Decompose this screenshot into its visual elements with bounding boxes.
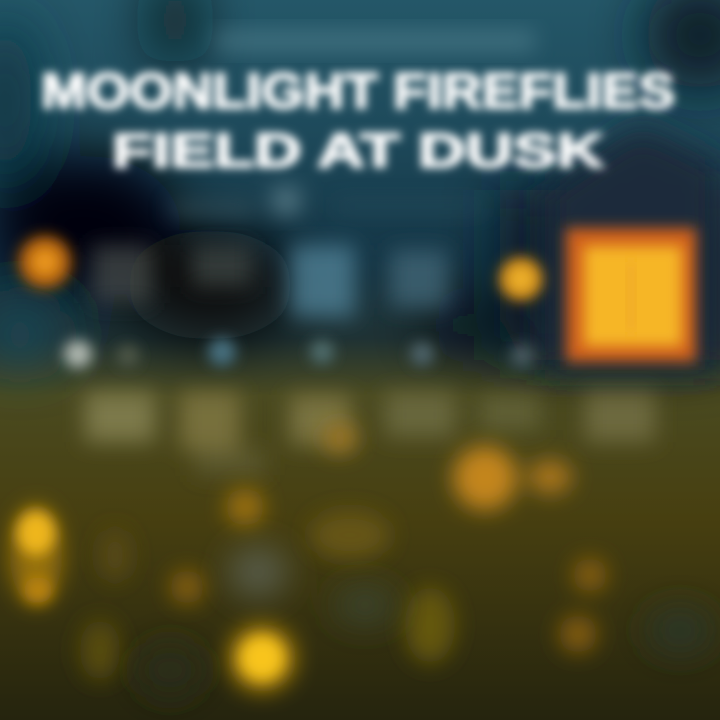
firefly: brightest lower centre [228, 624, 296, 692]
row of small icons [64, 338, 534, 368]
subheading blur [170, 187, 485, 216]
house roof silhouette [545, 125, 720, 370]
row of middle panels [92, 245, 448, 317]
faint heading band above the title [215, 30, 535, 52]
title [41, 63, 675, 178]
title line 1: MOONLIGHT FIREFLIES [41, 63, 675, 119]
muted blue-grey patches in the lower field [135, 546, 715, 700]
glowing lantern centre right [499, 257, 543, 301]
title line 2: FIELD AT DUSK [112, 125, 604, 178]
dark tree line and house silhouettes [0, 0, 720, 363]
lit house window [566, 228, 696, 362]
fireflies: dim scattered [80, 488, 607, 680]
row of pale grass blocks [85, 392, 655, 475]
fireflies: cluster centre right [323, 423, 572, 510]
fireflies: bright left [10, 505, 62, 605]
glowing lantern left [18, 235, 72, 289]
